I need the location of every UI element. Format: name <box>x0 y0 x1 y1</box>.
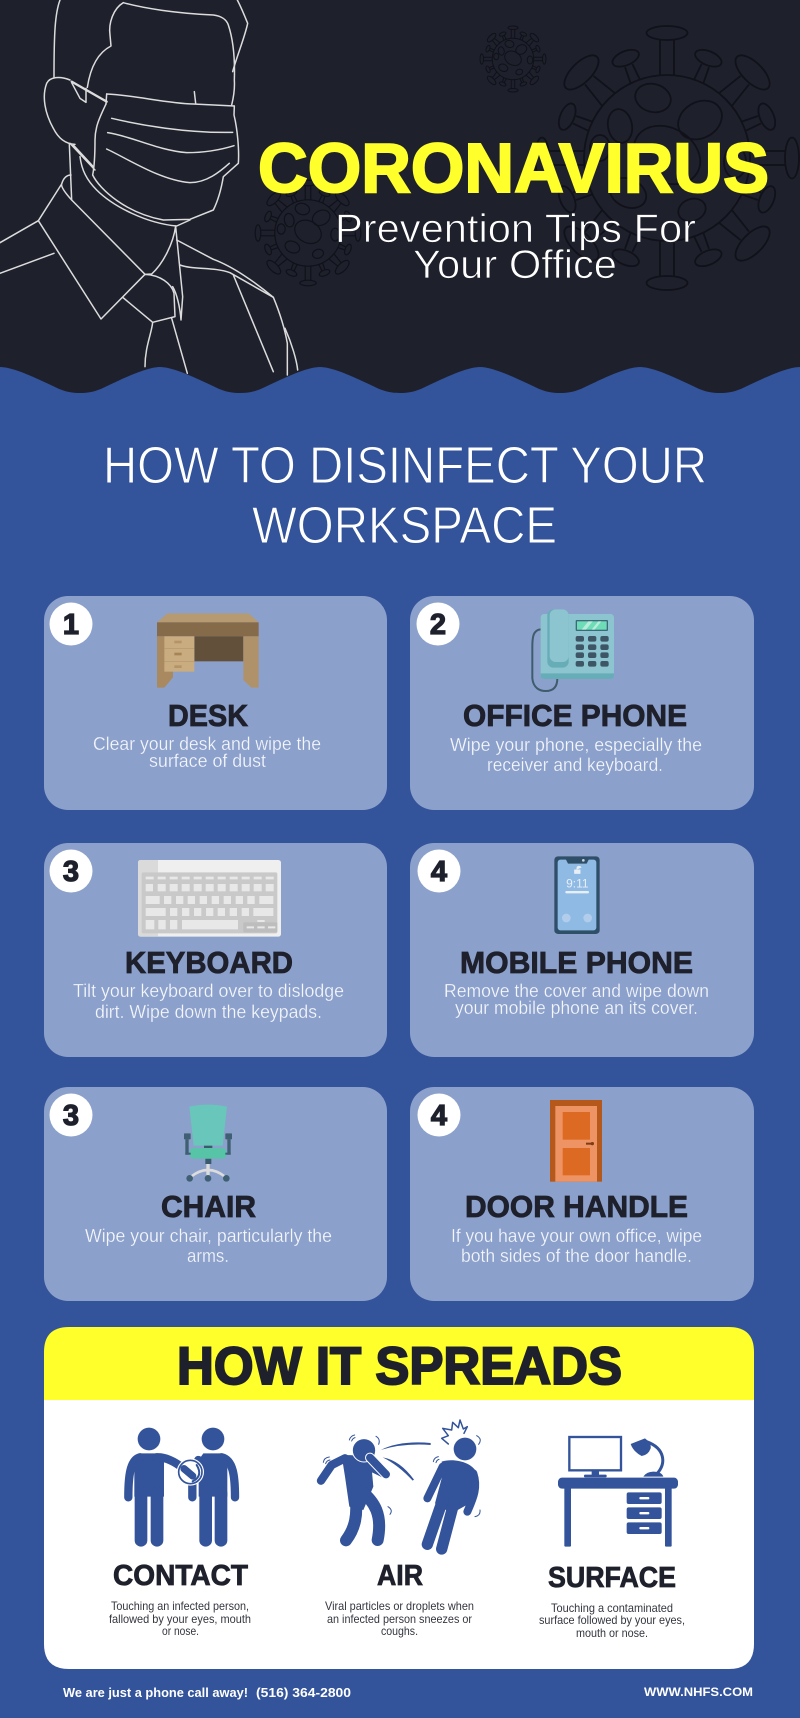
icon: surface <box>558 1437 678 1547</box>
text block: receiver and keyboard. <box>487 755 663 775</box>
icon: air <box>321 1420 480 1549</box>
icon: chair <box>184 1105 232 1182</box>
text block: Viral particles or droplets when <box>325 1599 474 1613</box>
panel: office phone <box>410 596 754 810</box>
icon: door <box>550 1100 602 1182</box>
virus: large <box>535 26 799 290</box>
text block: Remove the cover and wipe down <box>444 981 709 1001</box>
icon: office phone <box>532 609 614 691</box>
heading: DOOR HANDLE <box>465 1189 688 1224</box>
panel: mobile phone: 4 <box>431 856 447 888</box>
text block <box>450 735 702 775</box>
text block: mouth or nose. <box>576 1626 648 1640</box>
text block <box>73 981 344 1022</box>
panel: office phone: 2 <box>430 609 446 641</box>
heading: KEYBOARD <box>125 945 293 980</box>
virus: small <box>480 26 546 92</box>
panel: mobile phone <box>410 843 754 1057</box>
panel: desk: 1 <box>63 609 79 641</box>
subtitle line 2: Your Office <box>413 243 617 287</box>
text block <box>109 1599 251 1638</box>
text block <box>444 981 709 1018</box>
header panel <box>0 0 800 393</box>
heading: MOBILE PHONE <box>460 945 693 980</box>
icon: contact <box>128 1428 235 1547</box>
section heading <box>103 437 707 555</box>
text block: Clear your desk and wipe the <box>93 734 321 754</box>
text block: Wipe your chair, particularly the <box>85 1226 332 1246</box>
icon: desk <box>157 613 259 688</box>
section heading: HOW TO DISINFECT YOUR <box>103 437 707 495</box>
text block: Wipe your phone, especially the <box>450 735 702 755</box>
text block: Touching an infected person, <box>111 1599 249 1613</box>
text block: an infected person sneezes or <box>327 1612 472 1626</box>
icon: mobile phone: 9:11 <box>566 877 589 891</box>
text block <box>539 1601 685 1640</box>
subtitle line 1: Prevention Tips For <box>335 207 696 251</box>
text block <box>93 734 321 771</box>
panel: desk <box>44 596 387 810</box>
panel: door handle: 4 <box>431 1100 447 1132</box>
footer: website: WWW.NHFS.COM <box>644 1687 753 1699</box>
text block: or nose. <box>162 1624 199 1638</box>
text block <box>85 1226 332 1266</box>
text block: dirt. Wipe down the keypads. <box>95 1002 322 1022</box>
panel white body <box>44 1400 754 1669</box>
panel: keyboard: 3 <box>63 856 79 888</box>
panel: door handle <box>410 1087 754 1301</box>
text block: both sides of the door handle. <box>461 1246 692 1266</box>
text block: If you have your own office, wipe <box>451 1226 702 1246</box>
text block: fallowed by your eyes, mouth <box>109 1612 251 1626</box>
text block: surface followed by your eyes, <box>539 1613 685 1627</box>
heading: CONTACT <box>113 1560 248 1592</box>
heading: AIR <box>377 1560 423 1592</box>
heading: SURFACE <box>548 1562 676 1594</box>
section heading: WORKSPACE <box>252 497 557 555</box>
footer: phone call <box>63 1685 351 1700</box>
panel: how it spreads <box>44 1327 754 1669</box>
panel yellow header <box>44 1327 754 1400</box>
text block: arms. <box>187 1246 229 1266</box>
heading: CHAIR <box>161 1189 256 1224</box>
text block <box>325 1599 474 1638</box>
icon: mobile phone <box>554 856 600 934</box>
footer: phone call: (516) 364-2800 <box>256 1685 351 1700</box>
virus: medium <box>255 180 361 286</box>
title: CORONAVIRUS <box>258 129 769 207</box>
text block: your mobile phone an its cover. <box>455 998 698 1018</box>
footer: phone call: We are just a phone call away! <box>63 1685 248 1700</box>
icon: keyboard <box>138 860 281 937</box>
text block: surface of dust <box>149 751 266 771</box>
text block: Tilt your keyboard over to dislodge <box>73 981 344 1001</box>
heading: OFFICE PHONE <box>463 698 687 733</box>
text block: coughs. <box>381 1624 418 1638</box>
text block <box>451 1226 702 1266</box>
header dark background with wave edge <box>0 0 800 393</box>
heading: DESK <box>168 698 249 733</box>
masked man line drawing <box>0 0 298 375</box>
text block: Touching a contaminated <box>551 1601 673 1615</box>
panel: keyboard <box>44 843 387 1057</box>
panel: chair <box>44 1087 387 1301</box>
panel: chair: 3 <box>63 1100 79 1132</box>
heading: HOW IT SPREADS <box>177 1337 622 1396</box>
